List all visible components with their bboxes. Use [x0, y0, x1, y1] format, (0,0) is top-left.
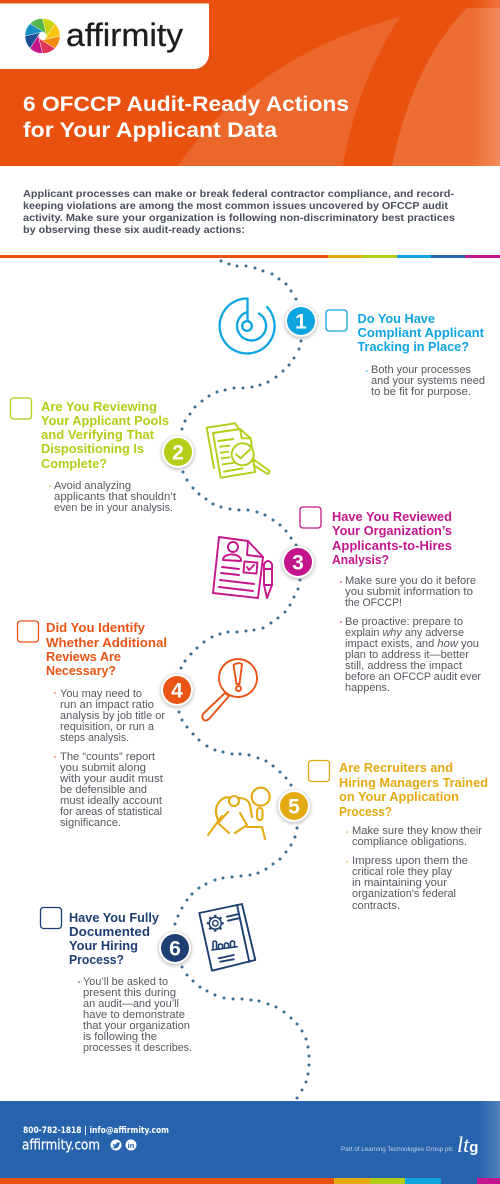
- heading 1: [358, 311, 485, 354]
- body text 5: Impress upon them the: [352, 855, 468, 867]
- body text 3: you submit information to: [345, 586, 473, 598]
- body text 3: [340, 575, 481, 694]
- heading 4: Necessary?: [46, 663, 116, 678]
- body text 4: you submit along: [60, 762, 146, 774]
- heading 5: Process?: [339, 804, 392, 819]
- heading 4: Did You Identify: [46, 620, 146, 635]
- number badge 2: [161, 436, 195, 470]
- intro paragraph: activity. Make sure your organization is following non-discriminatory best practices: [23, 213, 455, 224]
- body text 2: [49, 480, 176, 514]
- heading 1: Do You Have: [358, 311, 435, 326]
- checkbox 5: [308, 760, 330, 782]
- logo wordmark: affirmity: [66, 17, 183, 53]
- heading 2: Complete?: [41, 456, 107, 471]
- title: [23, 93, 349, 142]
- body text 1: and your systems need: [371, 375, 485, 387]
- checkbox 6: [40, 908, 62, 928]
- body text 5: organization's federal: [352, 888, 456, 900]
- body text 4: analysis by job title or: [60, 710, 165, 722]
- body text 6: an audit—and you’ll: [83, 998, 179, 1010]
- body text 6: that your organization: [83, 1020, 190, 1032]
- body text 4: must ideally account: [60, 795, 162, 807]
- intro paragraph: Applicant processes can make or break federal contractor compliance, and record-: [23, 189, 455, 200]
- title: 6 OFCCP Audit-Ready Actions: [23, 93, 349, 116]
- icon: applicant form and pencil: [213, 537, 272, 598]
- heading 6: [69, 910, 160, 967]
- heading 6: Process?: [69, 952, 124, 967]
- body text 2: applicants that shouldn’t: [54, 491, 176, 503]
- panel: step 4: [18, 620, 257, 829]
- number badge 1: 1: [295, 310, 307, 334]
- body text 4: steps analysis.: [60, 732, 129, 744]
- heading 3: Your Organization’s: [332, 523, 452, 538]
- intro paragraph: [23, 189, 455, 236]
- number badge 4: 4: [171, 680, 183, 702]
- body text 4: significance.: [60, 817, 121, 829]
- panel: step 5: [208, 760, 488, 912]
- heading 1: Tracking in Place?: [358, 339, 469, 354]
- body text 4: The “counts” report: [60, 751, 155, 763]
- body text 3: happens.: [345, 682, 390, 694]
- rainbow divider: [0, 255, 500, 258]
- body text 3: impact exists, and how you: [345, 638, 479, 650]
- icon: radar: [220, 298, 275, 353]
- icon: documents with magnifier: [207, 423, 269, 478]
- panel: step 3: [213, 507, 481, 694]
- panel: step 1: [220, 298, 485, 398]
- number badge 6: 6: [169, 938, 181, 960]
- body text 5: contracts.: [352, 900, 400, 912]
- dotted path connecting the steps: [175, 261, 309, 1098]
- checkbox 4: [18, 621, 38, 642]
- heading 4: Whether Additional: [46, 635, 167, 650]
- icon: affirmity aperture logo: [25, 18, 60, 54]
- header banner: [0, 0, 500, 166]
- body text 1: [366, 364, 485, 398]
- body text 1: Both your processes: [371, 364, 471, 376]
- body text 6: processes it describes.: [83, 1042, 192, 1054]
- body text 5: critical role they play: [352, 866, 453, 878]
- body text 6: [78, 976, 192, 1054]
- icon: twitter: [110, 1140, 122, 1150]
- panel: step 6: [40, 904, 255, 1054]
- parent company line: Part of Learning Technologies Group plc: [341, 1146, 454, 1153]
- heading 2: [41, 399, 169, 471]
- number badge 4: [160, 674, 194, 708]
- body text 5: Make sure they know their: [352, 825, 482, 837]
- heading 1: Compliant Applicant: [358, 325, 485, 340]
- body text 6: is following the: [83, 1031, 157, 1043]
- icon: process manual with gear and chart: [199, 904, 255, 971]
- logo panel: [0, 4, 209, 69]
- ltg logo: ltg: [457, 1132, 478, 1157]
- heading 3: Have You Reviewed: [332, 509, 452, 524]
- body text 2: even be in your analysis.: [54, 502, 173, 514]
- body text 5: in maintaining your: [352, 877, 448, 889]
- footer colour stripe: [0, 1178, 500, 1184]
- heading 6: Documented: [69, 924, 150, 939]
- body text 4: with your audit must: [59, 773, 163, 785]
- body text 2: Avoid analyzing: [54, 480, 131, 492]
- icon: magnifier with exclamation mark: [202, 659, 257, 720]
- number badge 6: [158, 932, 192, 966]
- body text 3: plan to address it—better: [345, 649, 469, 661]
- heading 2: Your Applicant Pools: [41, 413, 169, 428]
- intro paragraph: keeping violations are among the most common issues uncovered by OFCCP audit: [23, 201, 449, 212]
- heading 2: and Verifying That: [41, 427, 155, 442]
- heading 5: [339, 760, 488, 819]
- body text 4: You may need to: [60, 688, 142, 700]
- body text 4: run an impact ratio: [60, 699, 154, 711]
- heading 3: Applicants-to-Hires: [332, 538, 452, 553]
- body text 1: to be fit for purpose.: [371, 386, 471, 398]
- heading 3: [332, 509, 452, 567]
- heading 5: Are Recruiters and: [339, 760, 453, 775]
- number badge 3: [281, 546, 315, 580]
- body text 4: be defensible and: [60, 784, 147, 796]
- body text 3: explain why any adverse: [345, 627, 464, 639]
- body text 6: have to demonstrate: [83, 1009, 185, 1021]
- heading 5: on Your Application: [339, 789, 459, 804]
- contact details: 800-782-1818 | info@affirmity.com: [23, 1126, 169, 1136]
- body text 4: requisition, or run a: [60, 721, 154, 733]
- heading 6: Have You Fully: [69, 910, 160, 925]
- checkbox 3: [300, 507, 321, 528]
- body text 3: before an OFCCP audit ever: [345, 671, 481, 683]
- number badge 2: 2: [172, 442, 184, 464]
- title: for Your Applicant Data: [23, 119, 277, 142]
- icon: seated people with magnifier: [208, 788, 270, 839]
- heading 5: Hiring Managers Trained: [339, 775, 488, 790]
- body text 4: for areas of statistical: [60, 806, 162, 818]
- heading 6: Your Hiring: [69, 938, 138, 953]
- website: affirmity.com: [22, 1138, 100, 1154]
- body text 6: You’ll be asked to: [83, 976, 168, 988]
- body text 6: present this during: [83, 987, 176, 999]
- heading 4: [46, 620, 167, 678]
- heading 2: Dispositioning Is: [41, 441, 144, 456]
- body text 3: Make sure you do it before: [345, 575, 476, 587]
- body text 3: Be proactive: prepare to: [345, 616, 463, 628]
- intro paragraph: by observing these six audit-ready actions:: [23, 225, 245, 236]
- number badge 1: [284, 305, 318, 339]
- footer: [0, 1101, 500, 1184]
- body text 5: [346, 825, 482, 912]
- number badge 5: 5: [288, 796, 300, 818]
- checkbox 1: [326, 310, 347, 331]
- checkbox 2: [10, 398, 32, 419]
- body text 3: still, address the impact: [345, 660, 462, 672]
- icon: linkedin: [126, 1140, 136, 1150]
- body text 3: the OFCCP!: [345, 597, 402, 609]
- body text 4: [54, 688, 165, 829]
- icon: linkedin: in: [128, 1141, 135, 1150]
- body text 5: compliance obligations.: [352, 836, 467, 848]
- heading 4: Reviews Are: [46, 649, 121, 664]
- heading 2: Are You Reviewing: [41, 399, 157, 414]
- heading 3: Analysis?: [332, 552, 389, 567]
- number badge 3: 3: [292, 552, 304, 574]
- number badge 5: [277, 790, 311, 824]
- panel: step 2: [10, 398, 269, 514]
